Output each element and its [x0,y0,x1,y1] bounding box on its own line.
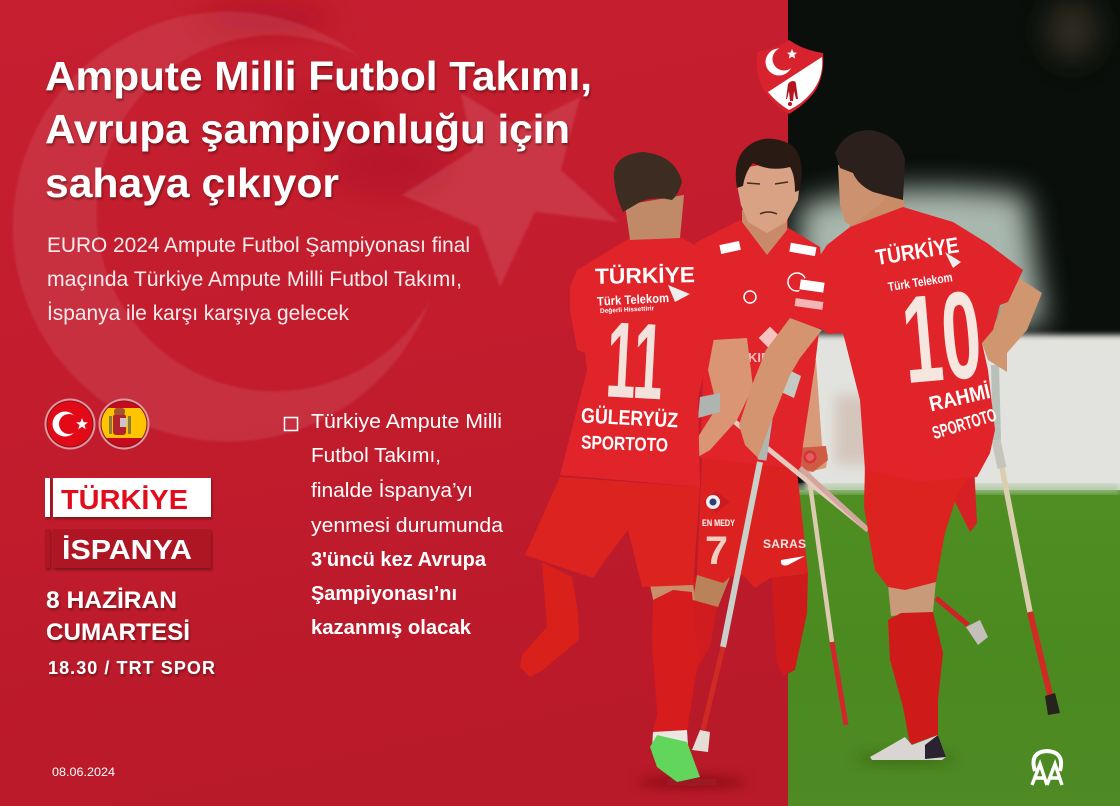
neck [625,195,684,240]
neck [848,195,905,228]
bullet text: Futbol Takımı, [311,445,441,467]
panel: red background with flag [0,0,675,442]
jersey lettering [795,232,999,443]
date stamp: 08.06.2024 [52,765,115,779]
jersey lettering: Türk Telekom [597,291,669,309]
label: İspanya: İSPANYA [62,534,192,565]
jersey lettering: SPORTOTO [930,405,999,443]
subtitle text: İspanya ile karşı karşıya gelecek [47,302,349,325]
white sock [652,730,688,748]
jersey lettering: TÜRKİYE [595,262,695,289]
standing leg [652,575,730,725]
bullet text: Türkiye Ampute Milli [311,411,502,433]
title [45,53,592,206]
bullet text [311,411,504,639]
title: Ampute Milli Futbol Takımı, [45,53,592,99]
sponsor badges: SARAS [763,537,806,551]
player: number 11 left [520,152,753,782]
jersey lettering: Türk Telekom [887,270,953,294]
stub leg sock [520,562,579,677]
bullet text: kazanmış olacak [311,617,472,639]
arm [793,360,828,472]
label: Türkiye: TÜRKİYE [61,484,188,515]
jersey lettering: SPORTOTO [581,432,668,456]
jersey [695,220,824,470]
face [737,160,800,233]
facial features [747,182,788,214]
bullet text: yenmesi durumunda [311,515,504,537]
sponsor badges: KIF [748,350,769,365]
boot [870,735,946,760]
match time and channel: 18.30 / TRT SPOR [48,658,215,678]
hair [835,130,905,200]
match date [46,587,190,646]
icon: Turkish flag [44,398,96,450]
arm [698,338,753,457]
shorts [525,477,700,587]
neck [742,210,787,255]
jersey lettering: RAHMİ [927,380,993,416]
jersey lettering: 10 [897,266,987,410]
crutch: near centre [692,358,801,752]
sponsor badges [702,241,816,573]
icon: federation shield logo [757,40,823,114]
player: number 7 middle [652,139,828,725]
label: Türkiye [45,478,211,517]
hair [614,152,682,212]
jersey [560,237,747,487]
stump flap [954,464,977,532]
subtitle text [47,234,470,325]
green boot [650,735,700,782]
label: İspanya [45,529,211,568]
jersey lettering: Değerli Hissettirir [600,305,655,315]
player shadows on ground [637,755,955,787]
crutch: right [995,365,1060,715]
hair [736,139,802,192]
icon: bullet square [284,418,298,430]
bullet text: finalde İspanya’yı [311,479,473,502]
icon: Spanish flag [98,398,150,450]
knee skin [650,583,695,604]
crutch: rear middle [808,470,846,725]
crutch grip [795,446,828,472]
jersey [790,207,1023,482]
subtitle text: maçında Türkiye Ampute Milli Futbol Takımı, [47,268,462,291]
icon: AA logo [1032,751,1062,785]
bullet text: Şampiyonası’nı [311,583,457,605]
title: Avrupa şampiyonluğu için [45,106,570,152]
left arm [739,318,822,458]
standing leg sock [888,612,943,745]
shorts [864,440,992,590]
standing leg sock [652,590,698,732]
crutch: long diagonal [735,422,988,645]
subtitle text: EURO 2024 Ampute Futbol Şampiyonası final [47,234,470,257]
match date: CUMARTESİ [46,619,190,646]
shorts [697,458,808,588]
title: sahaya çıkıyor [45,160,339,206]
sponsor badges: 7 [705,529,728,573]
match date: 8 HAZİRAN [46,587,177,614]
sponsor badges: EN MEDY [702,518,735,528]
face [838,165,885,226]
right arm [982,272,1042,372]
stub leg [772,573,808,676]
jersey lettering [581,262,695,456]
jersey lettering: TÜRKİYE [874,232,961,270]
panel: stadium photo background [788,0,1120,806]
knee skin [888,580,936,616]
bullet text: 3'üncü kez Avrupa [311,549,487,571]
jersey lettering: GÜLERYÜZ [581,404,679,433]
player: number 10 right [739,130,1042,760]
jersey lettering: 11 [603,299,667,422]
